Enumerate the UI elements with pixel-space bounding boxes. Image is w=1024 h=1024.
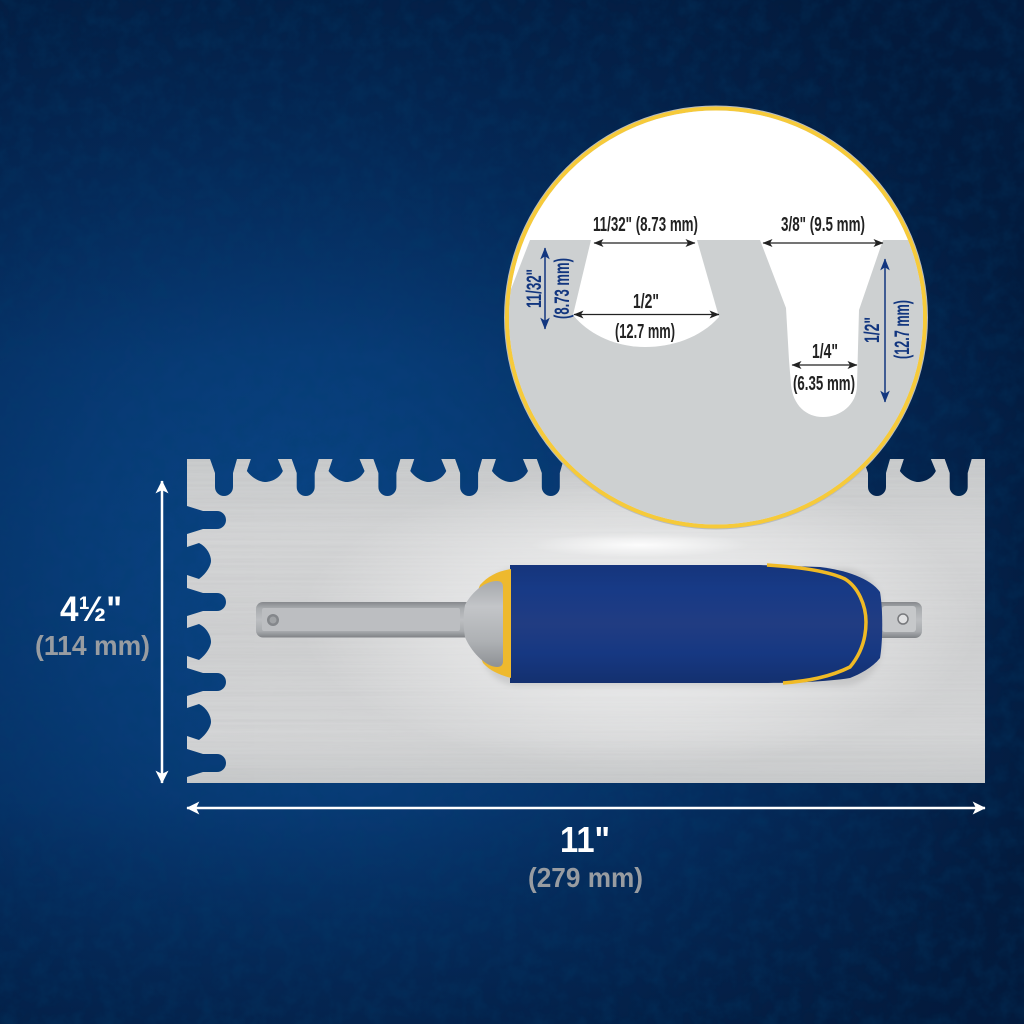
zoom circle: tooth profile	[500, 100, 930, 550]
label: 11/32 depth	[523, 248, 574, 329]
height dimension	[35, 481, 162, 783]
label: 3/8 width	[763, 214, 883, 243]
width arrow	[187, 807, 985, 809]
label: 1/4 width: 1/4"	[812, 341, 838, 363]
narrow notch	[760, 240, 883, 417]
label: 1/2 width	[574, 291, 719, 343]
yellow accent line	[767, 565, 866, 683]
label: 1/4 width: (6.35 mm)	[793, 373, 855, 395]
label: 1/2 width: 1/2"	[633, 291, 659, 313]
rear stub	[870, 602, 922, 638]
trowel steel plate	[187, 459, 985, 783]
metal cone	[464, 581, 503, 667]
height arrow	[161, 481, 163, 783]
width value: 11"	[560, 819, 610, 860]
grip	[510, 565, 882, 683]
trowel handle	[256, 565, 922, 686]
label: 1/2 width: (12.7 mm)	[615, 321, 675, 343]
label: 1/4 width	[792, 341, 857, 395]
handle shadow	[480, 568, 882, 686]
yellow collar	[470, 569, 511, 678]
height value: 4½"	[60, 590, 122, 629]
label: 11/32 width: 11/32" (8.73 mm)	[593, 214, 698, 236]
metal tang	[256, 602, 472, 638]
label: 3/8 width: 3/8" (9.5 mm)	[781, 214, 865, 236]
label: 11/32 depth: (8.73 mm)	[551, 258, 574, 319]
label: 11/32 width	[593, 214, 698, 243]
left edge sliver	[510, 240, 530, 290]
height metric: (114 mm)	[35, 630, 150, 661]
square notch	[573, 240, 719, 347]
width dimension	[187, 808, 985, 893]
label: 1/2 depth	[861, 259, 914, 402]
label: 11/32 depth: 11/32"	[523, 269, 546, 308]
label: 1/2 depth: (12.7 mm)	[891, 300, 914, 359]
width metric: (279 mm)	[528, 862, 643, 893]
label: 1/2 depth: 1/2"	[861, 317, 884, 343]
